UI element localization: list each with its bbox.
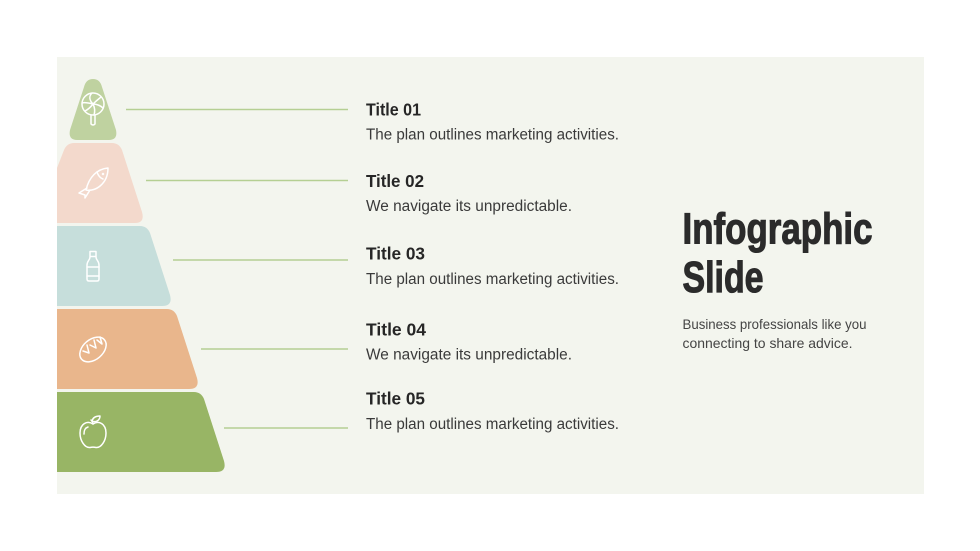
icon: bottle [87,252,99,281]
item 5 text: Title 05 [366,388,425,408]
item 1 text [366,100,619,144]
item 2 text [366,171,572,215]
description text [682,316,866,351]
item 1 text: Title 01 [366,100,421,120]
pyramid tier 2 [57,143,143,223]
icon: apple [80,416,106,448]
item 3 text [366,244,619,288]
icon: lollipop [82,93,104,125]
item 3 text: The plan outlines marketing activities. [366,271,619,288]
item 4 text [366,320,572,364]
item 4 text: We navigate its unpredictable. [366,346,572,364]
pyramid tier 3 [57,226,171,306]
icon: fish [79,168,108,198]
item 2 text: Title 02 [366,171,424,191]
pyramid tier 5 [57,392,225,472]
item 1 text: The plan outlines marketing activities. [366,126,619,144]
item 5 text [366,388,619,433]
description text: Business professionals like you [682,316,866,332]
connector lines [126,110,348,428]
slide panel background [57,57,924,494]
description text: connecting to share advice. [682,335,852,351]
pyramid [57,79,225,472]
item 5 text: The plan outlines marketing activities. [366,416,619,433]
heading [682,204,872,302]
pyramid tier 1 [70,79,116,140]
item 3 text: Title 03 [366,244,425,264]
item 4 text: Title 04 [366,320,426,340]
heading: Infographic [682,204,872,254]
pyramid tier 4 [57,309,198,389]
icon: bread [75,332,111,367]
heading: Slide [682,253,764,302]
item 2 text: We navigate its unpredictable. [366,198,572,215]
